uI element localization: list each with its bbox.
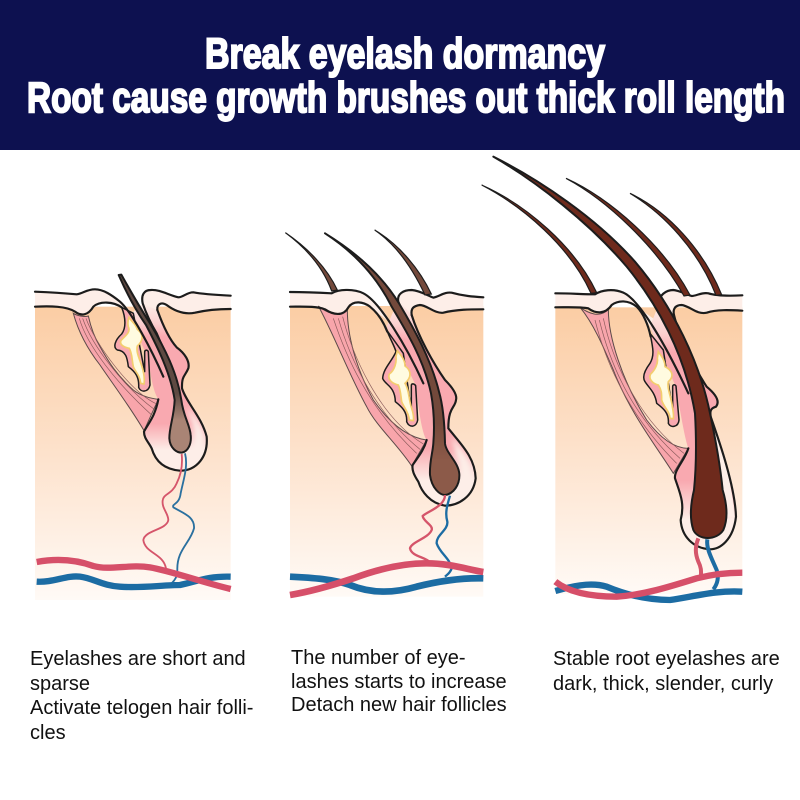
red vessel <box>37 560 231 589</box>
left hair <box>285 233 337 291</box>
sebaceous gland <box>644 333 679 426</box>
epidermis outlines <box>35 289 163 377</box>
blue vessel <box>290 577 483 591</box>
thin blood vessels <box>143 453 194 583</box>
epidermis outlines <box>290 290 423 383</box>
caption: stage two: lashes starts to increase <box>291 671 507 693</box>
follicle outline <box>144 310 207 471</box>
hair shaft and bulb <box>119 275 191 453</box>
skin layer <box>555 307 742 594</box>
red vessel <box>290 563 483 595</box>
middle hair <box>566 178 690 296</box>
caption: stage two: Detach new hair follicles <box>291 694 507 716</box>
sebaceous gland <box>383 330 418 426</box>
muscle <box>318 306 427 466</box>
main hair shaft and bulb <box>493 157 726 538</box>
panel: increasing eyelash follicle <box>285 230 483 597</box>
thin blood vessels <box>696 538 718 589</box>
epidermis band <box>290 290 483 333</box>
epidermis band <box>35 289 231 327</box>
skin layer <box>290 306 483 597</box>
far left hair <box>482 185 597 293</box>
pale area beside bulb <box>447 437 473 503</box>
panel: short sparse eyelash follicle <box>35 275 231 600</box>
caption: stage one: Eyelashes are short and <box>30 648 246 670</box>
blue vessel <box>555 585 742 600</box>
epidermis outlines <box>555 290 688 393</box>
title text <box>27 30 785 122</box>
follicle sheath <box>130 303 207 471</box>
caption: stage one: Activate telogen hair folli- <box>30 697 253 719</box>
caption: stage three: Stable root eyelashes are <box>553 648 780 670</box>
muscle <box>73 313 158 431</box>
caption: stage three: dark, thick, slender, curly <box>553 673 773 695</box>
title text: Break eyelash dormancy <box>205 30 605 78</box>
red vessel <box>555 573 742 597</box>
caption: stage one: sparse <box>30 673 90 695</box>
caption: stage one: cles <box>30 722 66 744</box>
panel: stable thick eyelash follicle <box>482 157 742 600</box>
follicle outline <box>674 315 736 549</box>
right hair <box>630 193 722 295</box>
pale band beside shaft <box>711 420 734 517</box>
sebaceous gland <box>115 307 150 391</box>
muscle <box>580 307 688 473</box>
thin blood vessels <box>410 495 452 577</box>
caption: stage two: The number of eye- <box>291 647 466 669</box>
skin layer <box>35 307 231 600</box>
follicle sheath <box>650 303 736 549</box>
title banner <box>0 0 800 150</box>
follicle sheath <box>387 300 476 506</box>
follicle outline <box>412 315 476 506</box>
right hair <box>375 230 431 295</box>
epidermis band <box>555 290 742 327</box>
main hair shaft and bulb <box>325 233 459 495</box>
pale area beside bulb <box>182 407 204 467</box>
blue vessel <box>37 576 231 587</box>
